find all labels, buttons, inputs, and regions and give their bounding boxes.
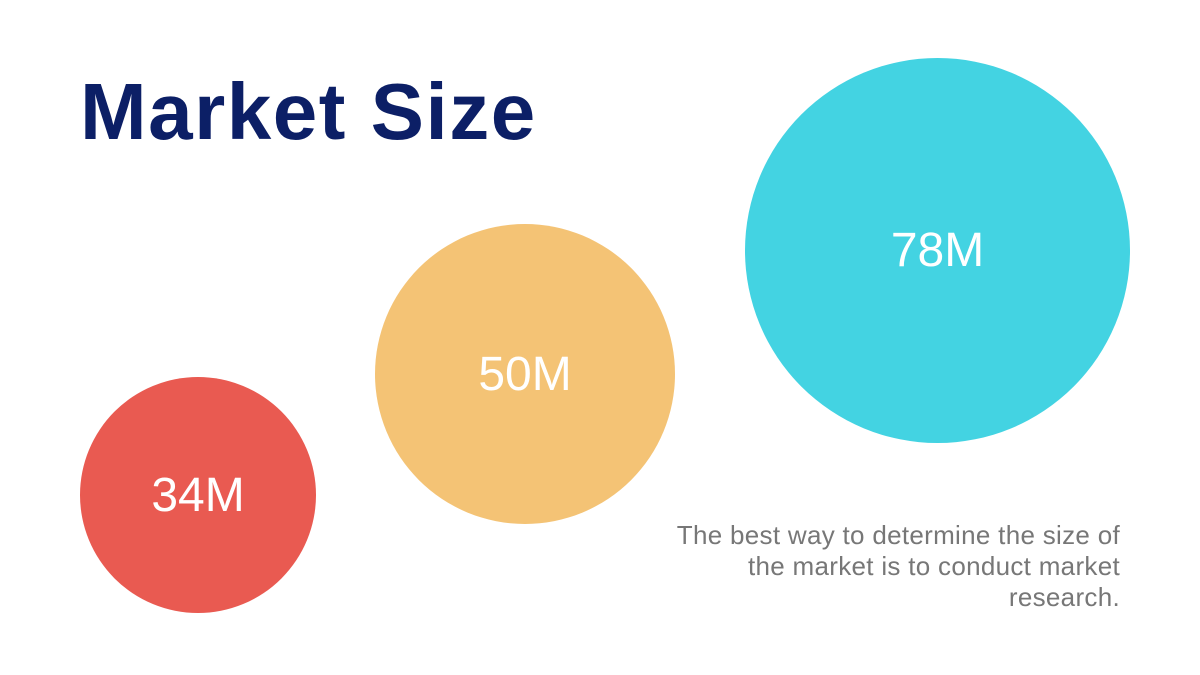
description text: the market is to conduct market xyxy=(748,551,1120,581)
circle: 34M: 34M xyxy=(151,468,245,522)
title: Market Size xyxy=(80,67,537,156)
description text: research. xyxy=(1009,582,1120,612)
circle: 50M: 50M xyxy=(478,348,572,400)
circle: 34M xyxy=(80,377,316,613)
description text: The best way to determine the size of xyxy=(677,520,1120,550)
circle: 78M: 78M xyxy=(891,224,984,277)
description text xyxy=(677,520,1120,612)
circle: 50M xyxy=(375,224,675,524)
circle: 78M xyxy=(745,58,1130,443)
